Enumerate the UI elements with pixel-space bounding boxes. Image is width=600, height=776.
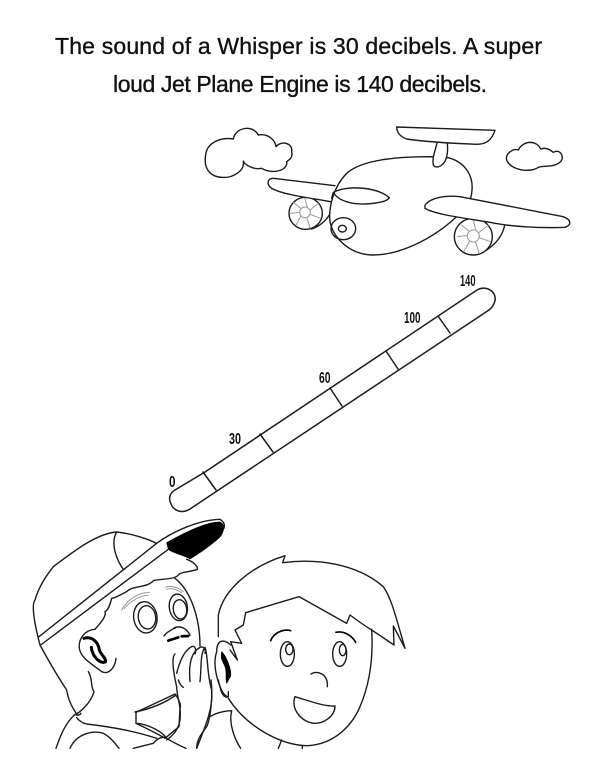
face outline — [228, 629, 372, 746]
neck marks — [278, 740, 302, 748]
face outline — [175, 578, 200, 646]
ear — [215, 641, 231, 697]
collar — [136, 694, 180, 738]
scale labels: 30 — [229, 431, 241, 448]
scale labels: 60 — [319, 370, 331, 387]
plane window stripe — [332, 188, 389, 204]
scale ticks — [203, 316, 450, 490]
back of hair — [40, 645, 94, 714]
plane tailplane — [397, 127, 495, 144]
plane right engine — [454, 218, 505, 255]
plane cockpit ring — [331, 218, 356, 240]
eyebrows — [271, 630, 356, 642]
nose — [164, 627, 190, 641]
scale labels — [169, 273, 476, 491]
plane left wing — [268, 178, 335, 202]
hair — [218, 556, 405, 660]
title: The sound of a Whisper is 30 decibels. A super — [55, 33, 542, 59]
cap dome — [33, 532, 157, 645]
cap brim — [39, 519, 224, 645]
icon: left cloud — [205, 128, 292, 177]
hair fringe — [95, 559, 197, 629]
illustration: whispering boy in cap — [33, 519, 224, 748]
title: loud Jet Plane Engine is 140 decibels. — [113, 71, 487, 97]
icon: right cloud — [506, 142, 562, 170]
plane tail fin — [433, 142, 448, 167]
illustration: lower bodies and collars — [56, 680, 241, 748]
scale labels: 100 — [404, 310, 421, 327]
title — [55, 33, 542, 97]
scale labels: 140 — [460, 273, 476, 290]
shirt of boy in cap — [56, 713, 186, 748]
decibel scale bar — [170, 288, 495, 511]
illustration: jet plane and clouds — [205, 127, 570, 255]
plane right wing — [425, 196, 570, 228]
nose — [311, 672, 327, 687]
eyebrows — [122, 586, 183, 610]
scale outline — [170, 288, 495, 511]
eyes — [132, 593, 189, 634]
mouth — [294, 697, 335, 723]
illustration: listening boy — [215, 556, 405, 748]
plane fuselage — [330, 157, 472, 255]
eyes — [280, 642, 347, 666]
scale labels: 0 — [169, 474, 176, 491]
cupped hand — [167, 646, 212, 748]
plane left engine — [289, 197, 329, 229]
cap visor black underside — [167, 522, 224, 559]
neck of listening boy — [197, 680, 241, 748]
ear — [79, 629, 116, 673]
jaw — [135, 695, 176, 712]
